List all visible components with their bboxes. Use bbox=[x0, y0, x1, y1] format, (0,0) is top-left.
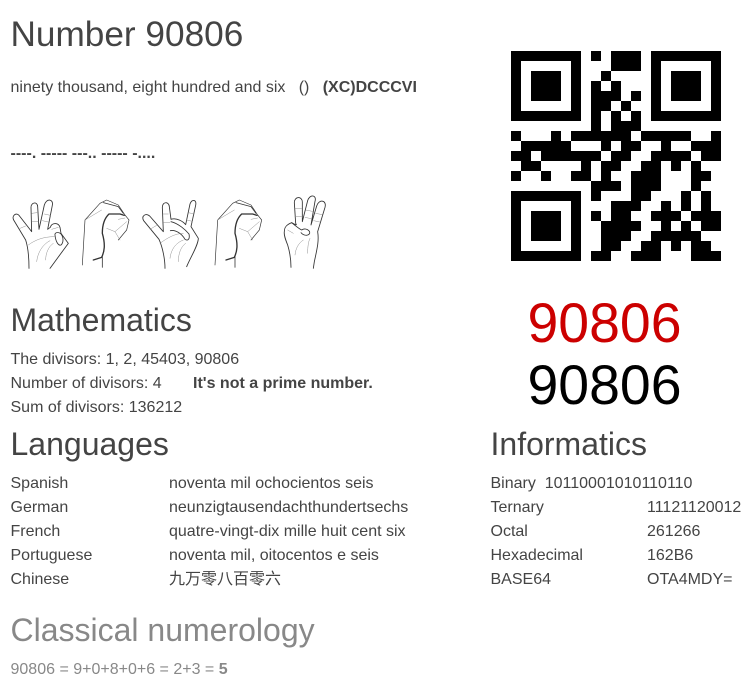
Hexadecimal: Hexadecimal bbox=[490, 547, 583, 564]
QR finder patterns bbox=[511, 51, 721, 261]
Portuguese bbox=[10, 547, 379, 564]
Chinese: Chinese bbox=[10, 571, 69, 588]
heading: Classical numerology: Classical numerology bbox=[10, 612, 315, 648]
title: Number 90806 bbox=[10, 15, 243, 54]
Octal bbox=[490, 523, 700, 540]
Ternary bbox=[490, 499, 741, 516]
large red number: 90806 bbox=[528, 292, 682, 354]
morse code: ----. ----- ---.. ----- -.... bbox=[10, 145, 155, 162]
sign language hands bbox=[12, 196, 326, 269]
divisors: The divisors: 1, 2, 45403, 90806 bbox=[10, 351, 239, 368]
Spanish: Spanish bbox=[10, 475, 68, 492]
BASE64: OTA4MDY= bbox=[647, 571, 732, 588]
QR data modules bbox=[511, 51, 721, 261]
Portuguese: noventa mil, oitocentos e seis bbox=[169, 547, 379, 564]
numerology sum: 90806 = 9+0+8+0+6 = 2+3 = 5 bbox=[10, 661, 228, 678]
BASE64 bbox=[490, 571, 732, 588]
heading: Languages: Languages bbox=[10, 426, 169, 462]
Octal: 261266 bbox=[647, 523, 700, 540]
large black number: 90806 bbox=[528, 354, 682, 416]
Ternary: 11121120012 bbox=[647, 499, 741, 516]
German: German bbox=[10, 499, 68, 516]
German bbox=[10, 499, 408, 516]
icon: hand sign 0 bbox=[82, 200, 129, 267]
number of divisors: Number of divisors: 4 bbox=[10, 375, 162, 392]
French: French bbox=[10, 523, 60, 540]
icon: hand sign 0 bbox=[215, 200, 262, 267]
German: neunzigtausendachthundertsechs bbox=[169, 499, 408, 516]
Hexadecimal: 162B6 bbox=[647, 547, 693, 564]
icon: hand sign 9 bbox=[13, 200, 68, 268]
number in words and roman numeral: ninety thousand, eight hundred and six () (XC)DCCCVI bbox=[10, 79, 417, 96]
Chinese bbox=[10, 570, 281, 588]
QR code bbox=[511, 51, 721, 261]
informatics table bbox=[490, 475, 741, 588]
Ternary: Ternary bbox=[490, 499, 544, 516]
icon: hand sign 8 bbox=[143, 200, 198, 268]
Portuguese: Portuguese bbox=[10, 547, 92, 564]
Chinese: 九万零八百零六 bbox=[169, 571, 281, 588]
icon: hand sign 6 bbox=[284, 196, 325, 268]
heading: Informatics: Informatics bbox=[490, 426, 647, 462]
Spanish bbox=[10, 475, 374, 492]
French bbox=[10, 523, 406, 540]
Hexadecimal bbox=[490, 547, 693, 564]
heading: Mathematics: Mathematics bbox=[10, 302, 192, 338]
prime statement: It's not a prime number. bbox=[193, 375, 373, 392]
Octal: Octal bbox=[490, 523, 528, 540]
BASE64: BASE64 bbox=[490, 571, 551, 588]
sum of divisors: Sum of divisors: 136212 bbox=[10, 399, 182, 416]
Binary: Binary 10110001010110110 bbox=[490, 475, 692, 492]
Spanish: noventa mil ochocientos seis bbox=[169, 475, 374, 492]
mathematics text block bbox=[10, 351, 373, 416]
languages table bbox=[10, 475, 408, 588]
French: quatre-vingt-dix mille huit cent six bbox=[169, 523, 406, 540]
